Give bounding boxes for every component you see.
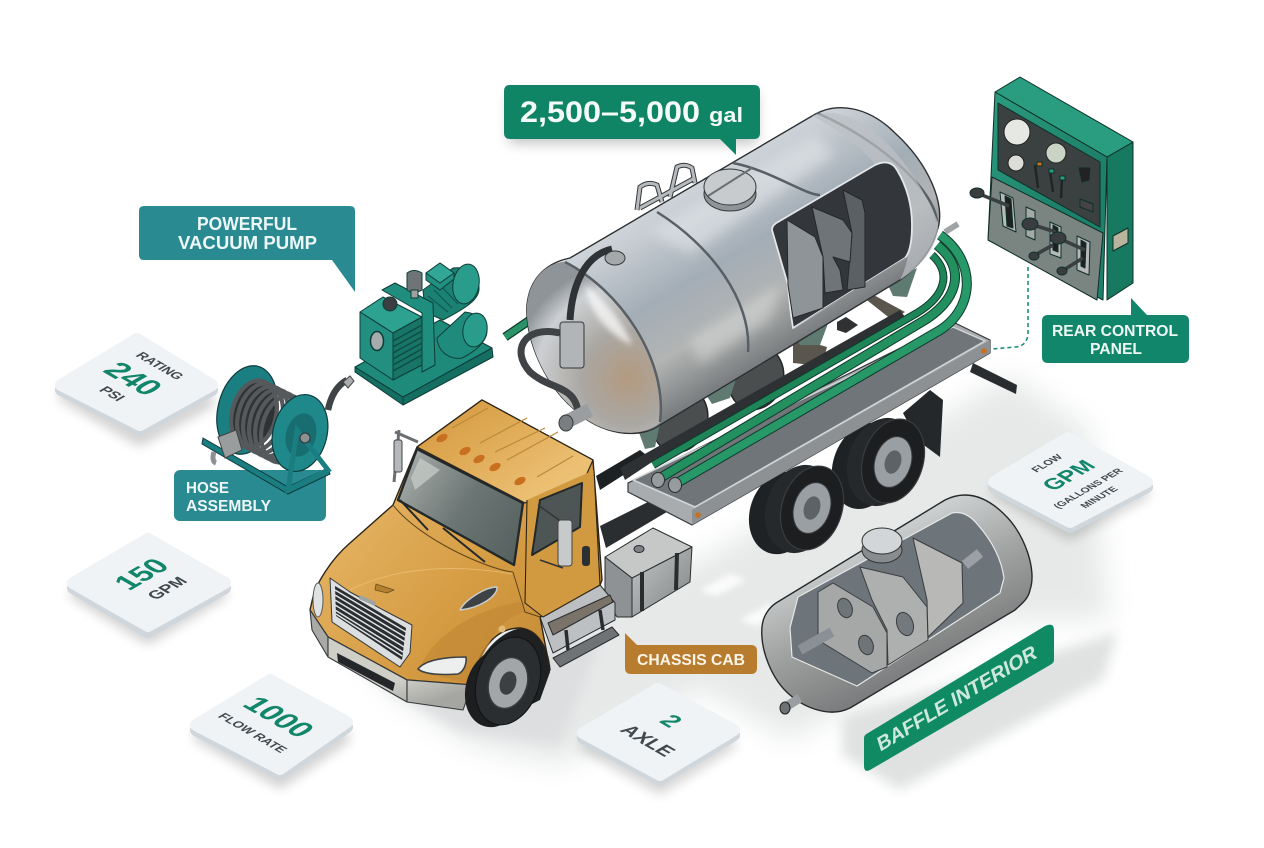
label: powerful vacuum pump <box>139 206 355 292</box>
flatbed deck <box>620 310 990 525</box>
card: rating 240 psi: RATING <box>132 350 188 382</box>
banner: baffle interior <box>864 625 1054 771</box>
ground shadows <box>350 375 1118 790</box>
label: chassis cab <box>625 633 757 674</box>
headlights <box>418 657 466 674</box>
hood vent <box>375 584 394 593</box>
card: 2 axle <box>583 689 734 786</box>
label: rear control panel: REAR CONTROL <box>1052 323 1178 340</box>
icon: rear dual wheels <box>739 390 943 563</box>
icon: stainless tank with cutaway <box>521 108 940 433</box>
card: 1000 flow rate: FLOW RATE <box>215 711 290 755</box>
label: hose assembly <box>174 470 326 521</box>
icon: truck cab <box>310 400 602 720</box>
callout: tank capacity: 2,500–5,000 <box>520 96 700 129</box>
label: powerful vacuum pump: VACUUM PUMP <box>178 233 317 253</box>
icon: hose reel <box>202 359 354 494</box>
callout: tank capacity <box>504 85 760 155</box>
label: powerful vacuum pump: POWERFUL <box>197 214 297 234</box>
label: chassis cab: CHASSIS CAB <box>637 652 745 669</box>
card: 1000 flow rate: 1000 <box>235 692 321 742</box>
windshield <box>398 449 523 565</box>
card: flow gpm: (GALLONS PER <box>1051 467 1126 510</box>
icon: baffle cutaway tank <box>762 495 1032 714</box>
fill cap <box>704 168 756 211</box>
icon: tank support wheels and saddles <box>637 268 917 460</box>
card: rating 240 psi <box>61 339 212 438</box>
card: 150 gpm: 150 <box>107 554 177 595</box>
dashed leader line <box>992 267 1028 349</box>
wheel arch <box>472 628 550 720</box>
label: rear control panel <box>1042 298 1189 363</box>
card: flow gpm: MINUTE <box>1078 485 1121 510</box>
card: rating 240 psi: PSI <box>96 384 129 403</box>
card: 150 gpm <box>73 539 225 636</box>
dark hoses and filter <box>521 249 625 431</box>
card: 150 gpm: GPM <box>144 575 192 602</box>
card: flow gpm: GPM <box>1036 456 1101 494</box>
roof <box>417 400 593 503</box>
card: flow gpm <box>994 438 1147 532</box>
label: hose assembly: HOSE <box>186 480 229 497</box>
label: rear control panel: PANEL <box>1090 341 1142 358</box>
bumper <box>310 610 328 657</box>
door and window <box>525 470 600 617</box>
icon: fuel tank and steps <box>540 528 692 667</box>
icon: vacuum pump <box>355 262 493 405</box>
callout: tank capacity: gal <box>709 105 743 127</box>
icon: rear control panel <box>970 77 1133 300</box>
label: hose assembly: ASSEMBLY <box>186 498 272 515</box>
card: 2 axle: 2 <box>653 711 688 731</box>
card: flow gpm: FLOW <box>1030 453 1066 474</box>
cab body <box>310 400 602 685</box>
card: 1000 flow rate <box>196 680 347 780</box>
handles <box>637 165 695 210</box>
cutaway opening <box>772 162 912 328</box>
grille <box>330 578 412 667</box>
banner: baffle interior: BAFFLE INTERIOR <box>875 641 1040 757</box>
chassis frame <box>596 293 1017 548</box>
icon: front wheel <box>455 629 551 735</box>
card: rating 240 psi: 240 <box>96 357 171 400</box>
card: 2 axle: AXLE <box>615 722 680 760</box>
icon: green hoses <box>505 224 967 492</box>
